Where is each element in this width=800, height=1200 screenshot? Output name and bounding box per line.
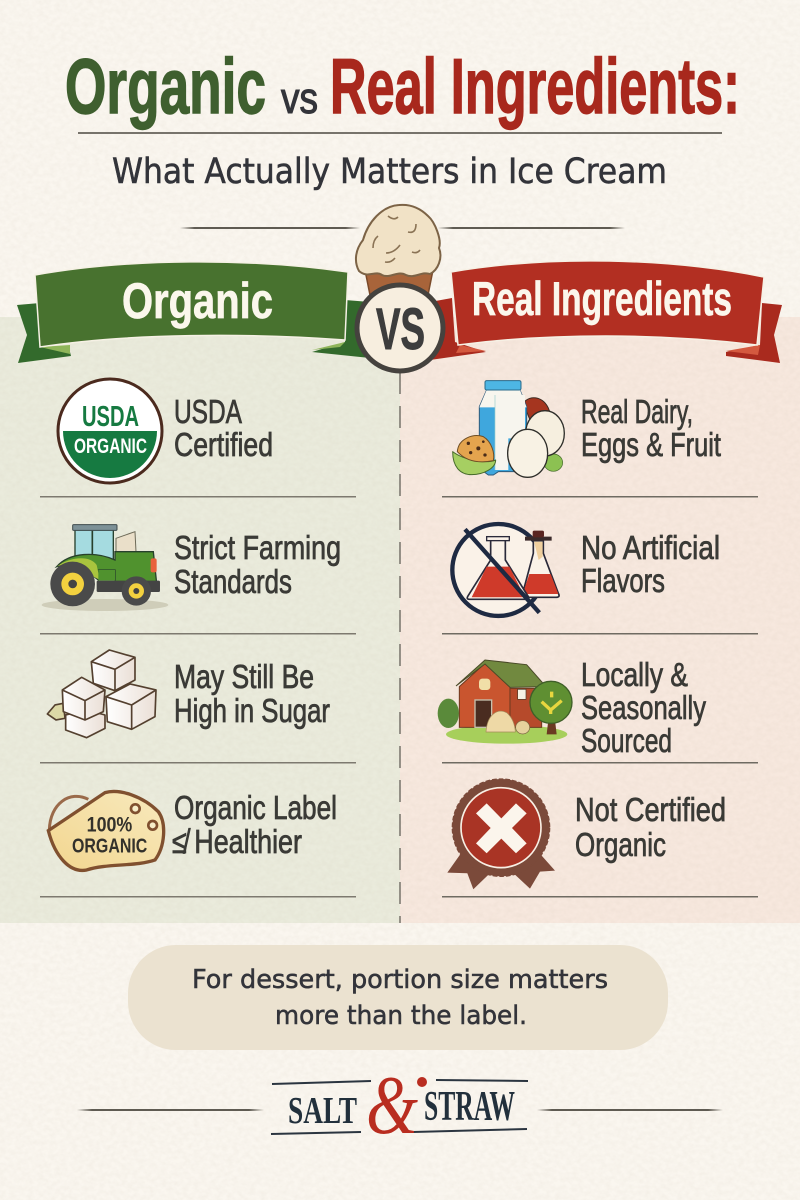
- logo: Salt & Straw: [271, 1059, 528, 1152]
- icon: 100% organic tag: 100%: [87, 813, 132, 837]
- text: USDA certified: USDA: [174, 393, 242, 430]
- text: not certified organic: Not Certified: [575, 791, 726, 828]
- text: locally and seasonally sourced: Sourced: [581, 722, 672, 759]
- banner: real ingredients: [430, 261, 782, 363]
- text: may still be high in sugar: May Still Be: [174, 658, 314, 695]
- icon: 100% organic tag: [48, 792, 164, 870]
- icon: local farm house: [438, 660, 572, 744]
- text: organic label healthier: ≰ Healthier: [172, 823, 302, 860]
- logo: Salt & Straw: &: [366, 1059, 419, 1152]
- panel: organic background: [0, 317, 400, 923]
- callout: portion size: For dessert, portion size matters: [192, 965, 608, 995]
- icon: USDA organic seal: [58, 379, 162, 483]
- title: [65, 42, 740, 130]
- text: USDA certified: [174, 393, 273, 463]
- text: organic label healthier: [172, 789, 337, 860]
- icon: ice cream scoop: [356, 205, 440, 305]
- logo: Salt & Straw: SALT: [288, 1090, 357, 1132]
- icon: USDA organic seal: USDA: [82, 401, 139, 433]
- icon: USDA organic seal: ORGANIC: [74, 435, 147, 458]
- banner: organic: Organic: [122, 273, 273, 329]
- icon: tractor: [42, 525, 168, 611]
- callout: portion size: [128, 945, 668, 1050]
- text: locally and seasonally sourced: Seasonally: [581, 689, 706, 726]
- text: no artificial flavors: No Artificial: [581, 529, 720, 566]
- text: locally and seasonally sourced: Locally &: [581, 656, 688, 693]
- badge: VS: [357, 285, 443, 371]
- badge: VS: VS: [376, 297, 425, 362]
- text: strict farming: Standards: [174, 563, 292, 600]
- text: real dairy: Eggs & Fruit: [581, 426, 721, 463]
- icon: not certified ribbon: [447, 779, 555, 889]
- icon: sugar cubes: [47, 650, 156, 738]
- text: may still be high in sugar: [174, 658, 330, 729]
- panel: organic rows: [40, 379, 356, 898]
- text: organic label healthier: Organic Label: [174, 789, 337, 826]
- text: may still be high in sugar: High in Sugar: [174, 692, 330, 729]
- callout: portion size: more than the label.: [275, 1001, 527, 1031]
- icon: 100% organic tag: ORGANIC: [72, 835, 147, 858]
- text: no artificial flavors: Flavors: [581, 562, 665, 599]
- text: not certified organic: [575, 791, 726, 863]
- title: Organic: [65, 42, 266, 130]
- text: strict farming: Strict Farming: [174, 529, 341, 566]
- text: real dairy: Real Dairy,: [581, 393, 693, 430]
- subtitle: What Actually Matters in Ice Cream: [112, 152, 667, 192]
- panel: real ingredients background: [400, 317, 800, 923]
- logo: Salt & Straw: STRAW: [424, 1084, 515, 1130]
- icon: no artificial flavors: [452, 524, 559, 616]
- title: vs: [281, 74, 318, 123]
- text: not certified organic: Organic: [575, 826, 666, 863]
- text: real dairy: [581, 393, 721, 463]
- text: no artificial flavors: [581, 529, 720, 599]
- banner: organic: [17, 262, 370, 363]
- panel: real ingredient rows: [438, 381, 758, 898]
- text: USDA certified: Certified: [174, 426, 273, 463]
- icon: dairy, eggs and fruit: [453, 381, 564, 477]
- text: strict farming: [174, 529, 341, 600]
- text: locally and seasonally sourced: [581, 656, 706, 759]
